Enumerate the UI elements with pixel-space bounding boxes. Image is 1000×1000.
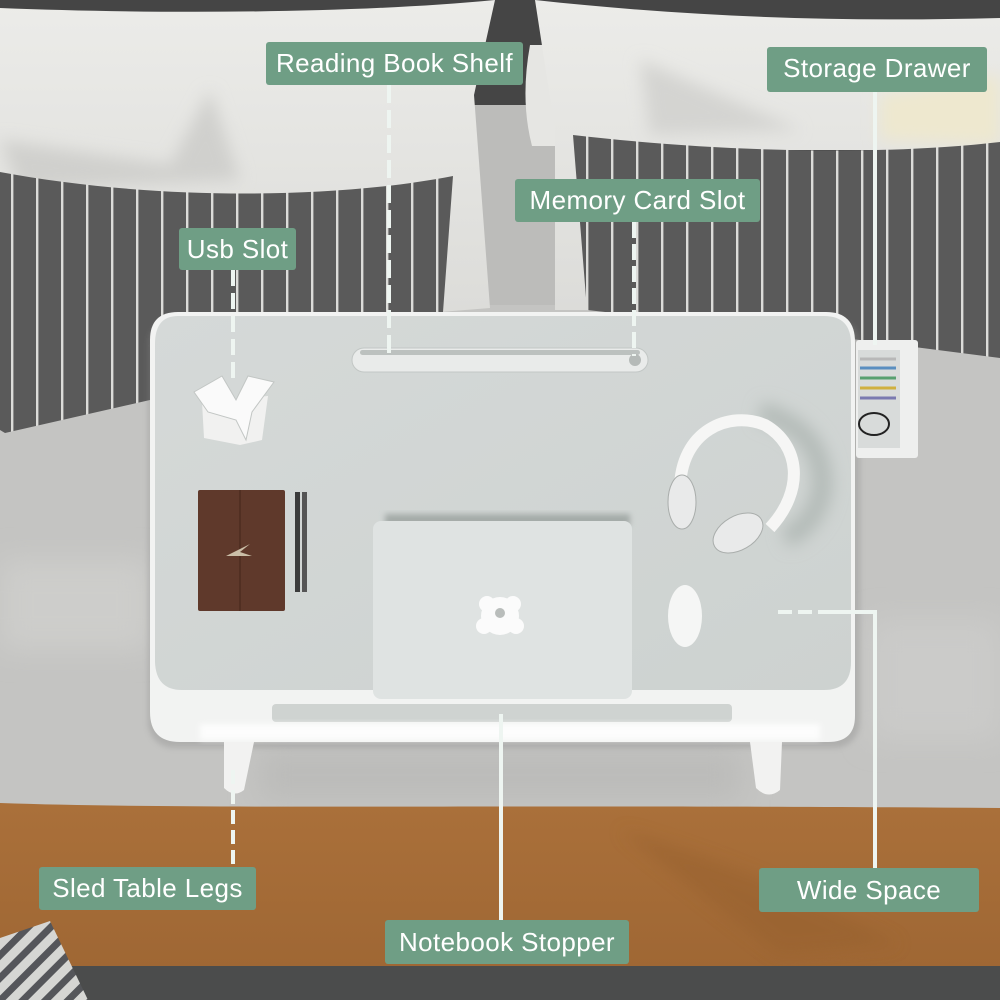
earbuds [194,376,274,440]
white pillow right [535,0,1000,310]
pillow shadow left [0,90,240,190]
small patterned cushion [0,921,88,1000]
drawer inner [858,350,900,448]
glasses [859,413,889,435]
left leg [224,742,254,794]
right ear cup [706,505,770,561]
headphone shadow [760,412,822,538]
striped pillow left [0,172,453,433]
label: reading book shelf [266,42,523,85]
leader: memory card slot [632,222,636,356]
label: reading book shelf: Reading Book Shelf [276,48,513,78]
label: sled table legs [39,867,256,910]
laptop [373,521,632,699]
leader: storage drawer [873,90,877,345]
label: usb slot [179,228,296,270]
leader: usb slot [231,270,235,385]
usb hub [202,396,268,445]
pens [860,359,896,398]
drawer body [856,340,918,458]
label: storage drawer [767,47,987,92]
pillow shadow right [640,60,800,135]
center bolster [525,45,560,146]
leader: wide space dashed part [778,610,822,614]
label: notebook stopper [385,920,629,964]
center bed gap [470,105,560,320]
reading shelf slot [352,348,648,372]
storage drawer [856,340,918,458]
label: sled table legs: Sled Table Legs [52,873,243,903]
label: memory card slot: Memory Card Slot [530,185,745,215]
lap desk [148,312,860,795]
leader: reading book shelf [387,85,391,356]
headphone band [680,420,794,528]
leader: wide space [822,612,875,870]
sheet shading [0,560,1000,800]
background: headboard [0,0,1000,320]
notebook tie [226,544,252,556]
laptop shadow [385,514,630,526]
pillow warm light [880,75,1000,145]
notebook spine [239,490,241,611]
pencil [295,492,300,592]
floor strip [0,966,1000,1000]
label: usb slot: Usb Slot [187,234,288,264]
label: notebook stopper: Notebook Stopper [399,927,615,957]
leader: notebook stopper [499,714,503,922]
right leg [750,742,782,795]
leader: sled table legs [231,770,235,868]
label: wide space [759,868,979,912]
pencil 2 [302,492,307,592]
laptop logo [476,596,524,635]
mouse [668,585,702,647]
brown blanket [0,803,1000,968]
left ear cup [668,475,696,529]
desk top surface [155,316,851,690]
notebook stopper slot [272,704,732,722]
label: storage drawer: Storage Drawer [783,53,971,83]
striped pillow right [573,135,1000,358]
white pillow left [0,0,495,312]
notebook [198,490,285,611]
bed sheet [0,305,1000,810]
label: memory card slot [515,179,760,222]
label: wide space: Wide Space [797,875,941,905]
stopper highlight [200,724,820,740]
shelf channel [360,350,640,355]
memory card hole [629,354,641,366]
desk base [150,312,855,742]
blanket folds [620,830,900,955]
desk shadow [148,318,860,748]
